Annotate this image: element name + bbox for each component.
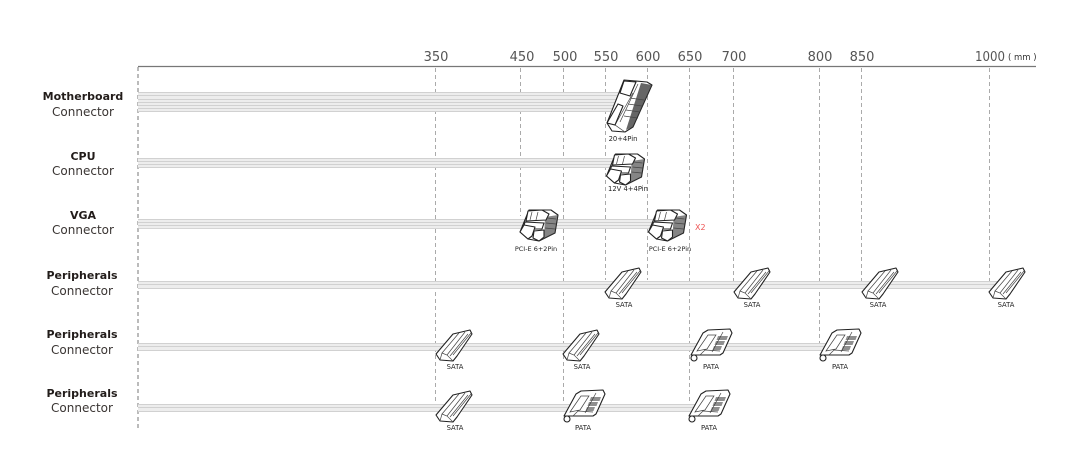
icon: PATA at 500 bbox=[564, 390, 605, 422]
icon: SATA at 850 bbox=[862, 268, 898, 299]
axis labels: 850 bbox=[850, 50, 874, 65]
label: SATA at 550: SATA bbox=[616, 301, 633, 309]
icon: 4+4 pin connector bbox=[606, 154, 644, 185]
icon: SATA at 350 bbox=[436, 391, 472, 422]
row: peripherals connector 2 bbox=[46, 328, 861, 371]
label: PATA at 500: PATA bbox=[575, 424, 591, 432]
callout: x2: X2 bbox=[695, 223, 706, 232]
heading: peripherals 2: Peripherals bbox=[46, 328, 118, 341]
subheading: peripherals 2: Connector bbox=[51, 343, 113, 357]
axis labels: 1000 bbox=[975, 50, 1005, 65]
icon: PATA at 800 bbox=[820, 329, 861, 361]
icon: SATA at 350 bbox=[436, 330, 472, 361]
icon: SATA at 700 bbox=[734, 268, 770, 299]
row: VGA connector bbox=[52, 209, 706, 253]
heading: motherboard: Motherboard bbox=[43, 90, 123, 103]
label: SATA at 1000: SATA bbox=[998, 301, 1015, 309]
subheading: peripherals 1: Connector bbox=[51, 284, 113, 298]
label: SATA at 350: SATA bbox=[447, 424, 464, 432]
icon: 20+4 pin connector bbox=[607, 80, 652, 132]
icon: PCI-E connector 2 bbox=[648, 210, 686, 241]
cable: motherboard bbox=[138, 92, 618, 112]
icon: PATA at 650 bbox=[691, 329, 732, 361]
icon: SATA at 500 bbox=[563, 330, 599, 361]
label: PATA at 650: PATA bbox=[703, 363, 719, 371]
axis line bbox=[138, 66, 1036, 68]
label: SATA at 350: SATA bbox=[447, 363, 464, 371]
row: motherboard connector bbox=[43, 80, 652, 143]
heading: VGA: VGA bbox=[70, 209, 97, 222]
subheading: VGA: Connector bbox=[52, 223, 114, 237]
cable: peripherals 1 bbox=[138, 281, 998, 289]
icon: PCI-E connector 1 bbox=[520, 210, 558, 241]
label: PATA at 650: PATA bbox=[701, 424, 717, 432]
label: PATA at 800: PATA bbox=[832, 363, 848, 371]
row: CPU connector bbox=[52, 150, 648, 193]
axis labels: 500 bbox=[553, 50, 577, 65]
label: PCI-E 2: PCI-E 6+2Pin bbox=[649, 245, 691, 253]
label: SATA at 700: SATA bbox=[744, 301, 761, 309]
label: SATA at 850: SATA bbox=[870, 301, 887, 309]
icon: PATA at 650 bbox=[689, 390, 730, 422]
heading: peripherals 1: Peripherals bbox=[46, 269, 118, 282]
subheading: CPU: Connector bbox=[52, 164, 114, 178]
heading: peripherals 3: Peripherals bbox=[46, 387, 118, 400]
axis labels: 550 bbox=[594, 50, 618, 65]
axis labels: 700 bbox=[722, 50, 746, 65]
axis labels: 600 bbox=[636, 50, 660, 65]
label: PCI-E 1: PCI-E 6+2Pin bbox=[515, 245, 557, 253]
label: 20+4Pin: 20+4Pin bbox=[609, 135, 637, 143]
subheading: motherboard: Connector bbox=[52, 105, 114, 119]
subheading: peripherals 3: Connector bbox=[51, 401, 113, 415]
axis labels: 650 bbox=[678, 50, 702, 65]
cable: peripherals 3 bbox=[138, 404, 703, 412]
icon: SATA at 1000 bbox=[989, 268, 1025, 299]
axis labels bbox=[424, 50, 1037, 65]
length gridlines bbox=[138, 67, 990, 431]
label: SATA at 500: SATA bbox=[574, 363, 591, 371]
axis labels: 800 bbox=[808, 50, 832, 65]
row: peripherals connector 3 bbox=[46, 387, 730, 432]
axis labels: 350 bbox=[424, 50, 448, 65]
cable: CPU bbox=[138, 158, 614, 168]
heading: CPU: CPU bbox=[70, 150, 96, 163]
axis labels: ( mm ) bbox=[1008, 53, 1037, 63]
axis labels: 450 bbox=[510, 50, 534, 65]
cable: VGA bbox=[138, 219, 653, 228]
row: peripherals connector 1 bbox=[46, 268, 1025, 309]
label: 12V 4+4Pin: 12V 4+4Pin bbox=[608, 185, 648, 193]
cable: peripherals 2 bbox=[138, 343, 833, 351]
icon: SATA at 550 bbox=[605, 268, 641, 299]
